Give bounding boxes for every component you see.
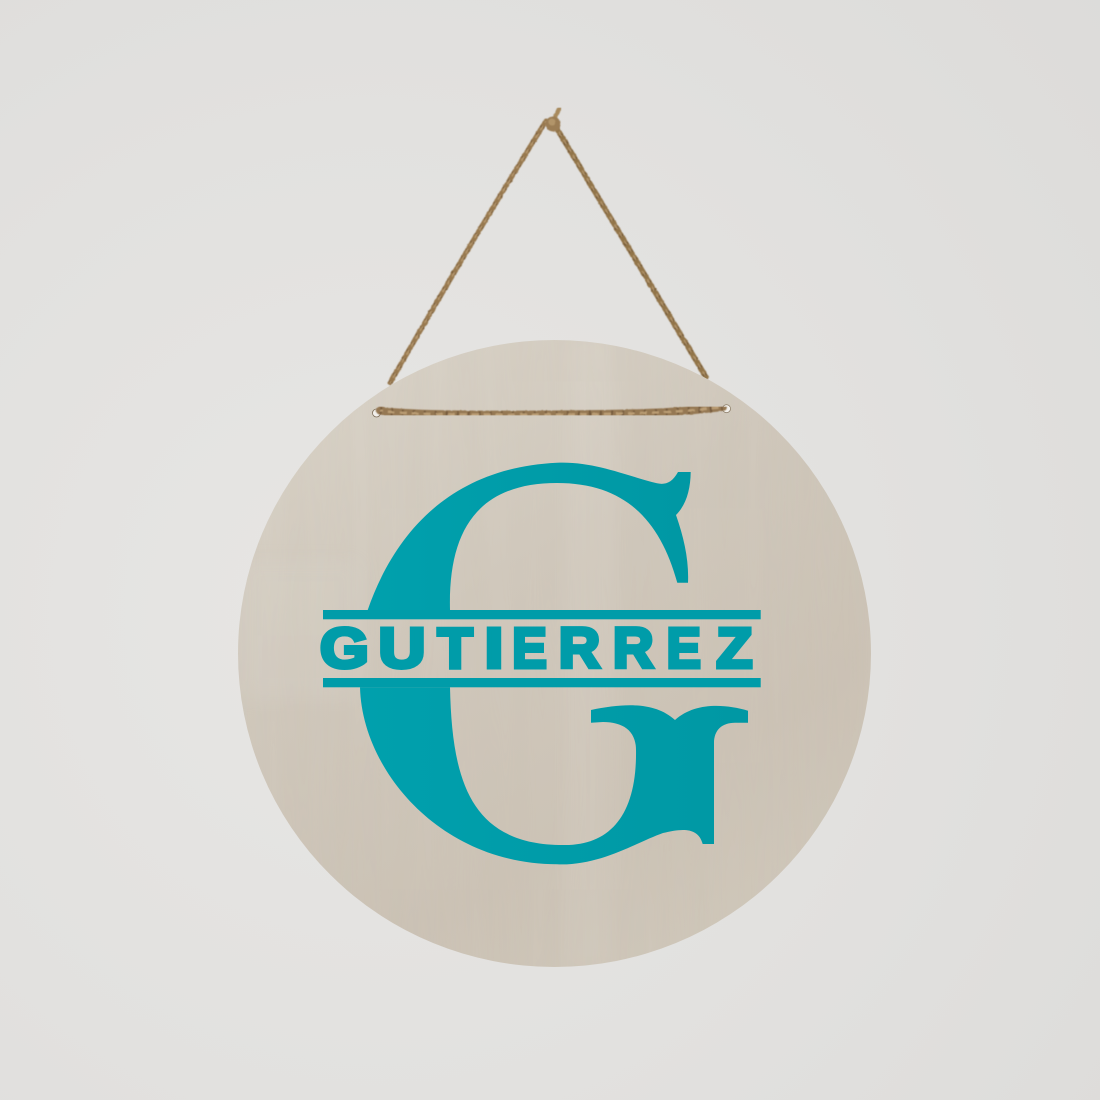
hanging rope: right strand: [556, 127, 706, 377]
family name: GUTIERREZ: G: [320, 616, 369, 679]
mounting hole: right: [722, 405, 730, 413]
wooden disc: [238, 340, 872, 970]
horizontal rope across the disc: [380, 407, 723, 415]
family name: GUTIERREZ: I: [485, 616, 503, 679]
family name: GUTIERREZ: U: [378, 616, 426, 679]
hanging rope: left strand: [390, 121, 546, 383]
family name: GUTIERREZ: R: [613, 616, 654, 679]
family name: GUTIERREZ: [320, 616, 752, 679]
top rule of name band: [323, 610, 761, 619]
family name: GUTIERREZ: E: [512, 616, 547, 679]
rope knot: [546, 109, 560, 132]
family name: GUTIERREZ: T: [438, 616, 473, 679]
family name: GUTIERREZ: R: [559, 616, 600, 679]
bottom rule of name band: [323, 678, 761, 687]
family name: GUTIERREZ: E: [667, 616, 701, 679]
monogram letter G: upper half: [368, 463, 691, 610]
family name: GUTIERREZ: Z: [716, 616, 752, 679]
mounting hole: left: [372, 409, 380, 417]
monogram letter G: lower half: [360, 687, 748, 864]
